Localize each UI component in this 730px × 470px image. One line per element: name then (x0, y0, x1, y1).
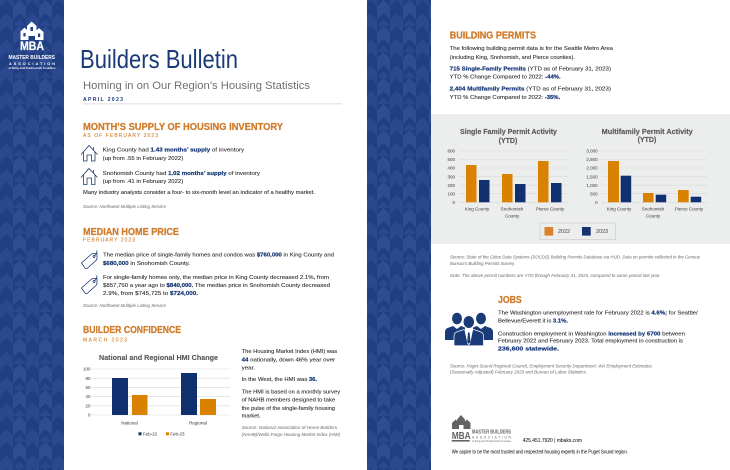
text: single-family prices: For single-family homes only, the median price in King County decreased 2.1%, from (103, 275, 329, 281)
source: Source: Puget Sound Regional Council, Employment Security Department: WA Employment Estimates (450, 363, 652, 368)
text: healthy market note: Many industry analysts consider a four- to six-month level an indicator of a healthy market. (83, 190, 315, 196)
bar chart: multifamily permits: 3,000 (586, 149, 598, 154)
text: median prices (103, 253, 334, 267)
text: HMI explanation: The HMI is based on a monthly survey (242, 390, 340, 396)
bar chart: single family permits: Single Family Permit Activity (460, 129, 557, 136)
text: Snohomish County supply: Snohomish County had 1.02 months’ supply of inventory (103, 171, 260, 177)
bar chart: HMI change: National (121, 420, 138, 426)
bar chart: single family permits: 300 (447, 174, 455, 179)
text: HMI explanation: year. (242, 366, 256, 372)
bar chart: HMI change: 60 (85, 385, 91, 390)
bar chart: multifamily permits: Snohomish (642, 207, 665, 212)
icon: business people (445, 313, 493, 346)
panel: building permits (450, 30, 614, 101)
bar chart: single family permits: Snohomish (501, 207, 524, 212)
panel: permit charts (431, 114, 730, 244)
bar chart: single family permits: 500 (447, 157, 455, 162)
text: single-family prices: $857,750 a year ago to $840,000. The median price in Snohomish County decreased (103, 283, 330, 289)
contact line: 425.451.7920 | mbaks.com (523, 438, 582, 444)
title: Builders Bulletin (80, 44, 238, 74)
text: unemployment: The Washington unemployment rate for February 2022 is 4.6%; for Seattle/ (498, 310, 698, 316)
footer logo: MASTER BUILDERS (472, 430, 512, 436)
logo: Master Builders Association: ASSOCIATION (9, 62, 55, 66)
text: multifamily permits: 2,404 Multifamily Permits (YTD as of February 31, 2023) (450, 87, 611, 93)
panel: median home price (82, 227, 334, 308)
bar chart: multifamily permits: Multifamily Permit Activity (602, 129, 693, 136)
bar chart: multifamily permits: County (646, 214, 661, 219)
text: construction employment (498, 332, 685, 352)
text: HMI explanation: of NAHB members designed to take (242, 398, 335, 404)
text: intro (450, 46, 614, 61)
bar chart: HMI change: 40 (85, 394, 91, 399)
text: multifamily permits: YTD % Change Compared to 2022: -35%. (450, 95, 561, 101)
footer logo: of King and Snohomish Counties (472, 440, 512, 443)
icon: house (81, 168, 98, 184)
bar chart: multifamily permits: King County (607, 207, 632, 212)
legend: permit years: 2023 (596, 229, 608, 235)
text: single-family permits: 715 Single-Family Permits (YTD as of February 31, 2023) (450, 67, 611, 73)
bar chart: single family permits: Pierce County (536, 207, 565, 212)
bar chart: HMI change: National and Regional HMI Change (99, 353, 218, 362)
right blue band (367, 0, 431, 470)
source: Source: National Association of Home Builders (242, 425, 338, 430)
bar chart: HMI change: 0 (88, 413, 91, 418)
bar chart: single family permits: 100 (447, 191, 455, 196)
text: construction employment: 236,600 statewide. (498, 346, 560, 352)
logo: Master Builders Association (8, 22, 56, 70)
bar chart: multifamily permits: 500 (590, 191, 598, 196)
source: Source: Northwest Multiple Listing Service (83, 204, 166, 209)
bar chart: multifamily permits: 0 (595, 200, 598, 205)
bar chart: single family permits: 600 (447, 149, 455, 154)
panel: builder confidence (83, 325, 341, 437)
bar chart: HMI change: Regional (189, 420, 207, 426)
bar chart: multifamily permits: 2,000 (586, 166, 598, 171)
text: construction employment: Construction employment in Washington increased by 6700 between (498, 332, 685, 338)
logo: Master Builders Association: MBA (20, 41, 44, 53)
bar chart: HMI change: 20 (85, 403, 91, 408)
bar chart: single family permits: 0 (452, 200, 455, 205)
bar chart: single family permits: King County (465, 207, 490, 212)
heading: building permits: BUILDING PERMITS (450, 30, 536, 42)
date: APRIL 2023 (83, 97, 123, 103)
text: single-family prices (103, 275, 330, 297)
source (450, 363, 652, 374)
icon: price tag (82, 276, 97, 294)
text: median prices: $680,000 in Snohomish County. (103, 261, 190, 267)
text: unemployment: Bellevue/Everett it is 3.1%. (498, 318, 568, 324)
text: single-family permits (450, 67, 611, 81)
legend: permit years (540, 223, 616, 239)
bar chart: HMI change (83, 353, 230, 436)
bar chart: multifamily permits: 1,500 (586, 174, 598, 179)
text: HMI explanation: The Housing Market Index (HMI) was (242, 349, 337, 355)
text: permit sources: Source: State of the Cities Data Systems (SOCDS) Building Permits Database via HUD. Data on permits collected in the Census (450, 254, 701, 259)
text: single-family permits: YTD % Change Compared to 2022: -44%. (450, 75, 561, 81)
bar chart: single family permits: 200 (447, 183, 455, 188)
text: HMI explanation: 44 nationally, down 46% year over (242, 358, 335, 364)
source (242, 425, 341, 437)
left blue band (0, 0, 64, 470)
subtitle: Homing in on Our Region’s Housing Statistics (83, 80, 310, 92)
subheading: median price: FEBRUARY 2023 (83, 238, 135, 244)
text: intro: (including King, Snohomish, and Pierce counties). (450, 55, 575, 61)
subheading: inventory: AS OF FEBRUARY 2023 (83, 133, 158, 139)
text: multifamily permits (450, 87, 611, 101)
icon: house (81, 146, 98, 161)
text: construction employment: February 2022 and February 2023. Total employment in construction is (498, 339, 683, 345)
logo: Master Builders Association: of King and Snohomish Counties (8, 66, 56, 70)
icon: price tag (82, 250, 97, 269)
heading: builder confidence: BUILDER CONFIDENCE (83, 325, 181, 336)
text: permit sources (450, 254, 701, 278)
legend: HMI (138, 432, 185, 436)
legend: permit years: 2022 (558, 229, 570, 235)
footer logo (452, 415, 512, 443)
heading: jobs: JOBS (498, 295, 522, 306)
bar chart: multifamily permits: 2,500 (586, 157, 598, 162)
text: HMI explanation: In the West, the HMI was 36. (242, 377, 318, 383)
bar chart: single family permits: County (505, 214, 520, 219)
bar chart: multifamily permits: (YTD) (638, 137, 656, 144)
text: King County supply: (up from .55 in February 2022) (103, 156, 183, 162)
heading: inventory: MONTH’S SUPPLY OF HOUSING INVENTORY (83, 122, 283, 133)
text: HMI explanation (242, 349, 340, 420)
bar chart: multifamily permits: 1,000 (586, 183, 598, 188)
text: intro: The following building permit data is for the Seattle Metro Area (450, 46, 614, 52)
text: permit sources: Note: The above permit numbers are YTD through February 31, 2023, compared to same period last year. (450, 273, 661, 278)
bar chart: multifamily permits: Pierce County (675, 207, 704, 212)
text: HMI explanation: market. (242, 414, 261, 420)
bar chart: multifamily permits (586, 129, 707, 219)
bar chart: single family permits: (YTD) (499, 138, 517, 145)
text: single-family prices: 2.9%, from $745,725 to $724,000. (103, 291, 198, 297)
source: (Seasonally Adjusted) February 2023 and Bureau of Labor Statistics. (450, 369, 587, 374)
legend: HMI: Feb-22 (143, 432, 158, 436)
logo: Master Builders Association: MASTER BUILDERS (8, 55, 55, 61)
source: Source: Northwest Multiple Listing Service (83, 303, 166, 308)
bar chart: HMI change: 80 (85, 376, 91, 381)
panel: jobs (445, 295, 698, 374)
bar chart: single family permits: 400 (447, 166, 455, 171)
text: King County supply (103, 148, 244, 162)
bar chart: single family permits (447, 129, 568, 219)
text: permit sources: Bureau’s Building Permits Survey. (450, 261, 515, 266)
text: Snohomish County supply (103, 171, 260, 185)
subheading: builder confidence: MARCH 2023 (83, 338, 127, 344)
text: HMI explanation: the pulse of the single-family housing (242, 406, 335, 412)
text: Snohomish County supply: (up from .41 in February 2022) (103, 179, 183, 185)
tagline: We aspire to be the most trusted and respected housing experts in the Puget Sound region. (452, 450, 628, 456)
text: unemployment (498, 310, 698, 324)
text: King County supply: King County had 1.43 months’ supply of inventory (103, 148, 244, 154)
heading: median price: MEDIAN HOME PRICE (83, 227, 179, 238)
legend: HMI: Feb-23 (170, 432, 185, 436)
footer logo: ASSOCIATION (472, 436, 512, 440)
panel: housing inventory (81, 122, 315, 209)
bar chart: HMI change: 100 (83, 367, 91, 372)
footer logo: MBA (452, 430, 471, 442)
source: (NAHB)/Wells Fargo Housing Market Index (HMI) (242, 432, 341, 437)
text: median prices: The median price of single-family homes and condos was $760,000 in King County and (103, 253, 334, 259)
